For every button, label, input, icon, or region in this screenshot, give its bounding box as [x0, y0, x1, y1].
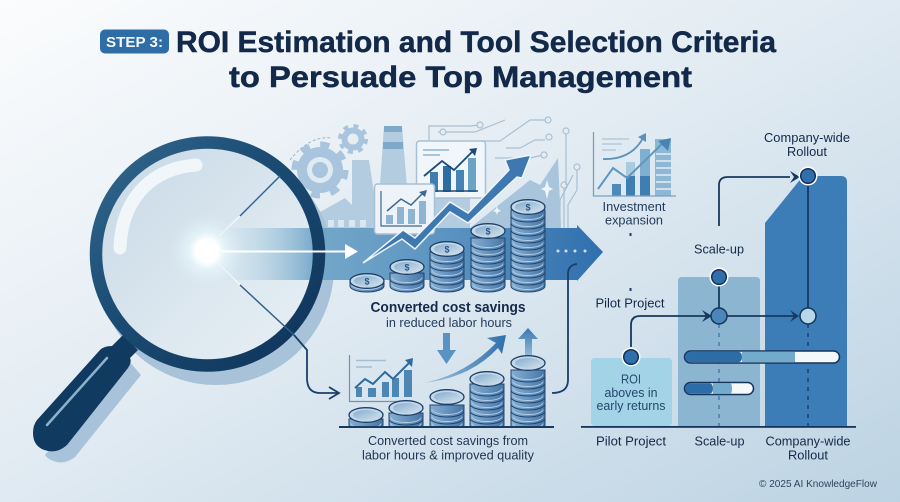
arrow: white beam	[222, 244, 358, 259]
gear large	[295, 145, 345, 195]
badge: step 3: STEP 3:	[106, 34, 163, 51]
text: pilot box: ROI	[621, 372, 641, 386]
progress bar: short	[684, 382, 754, 394]
badge: step 3	[100, 30, 169, 54]
stack 3	[430, 390, 464, 431]
chart card: large	[416, 141, 486, 198]
lower mini chart	[350, 355, 413, 402]
arrowheads	[702, 171, 800, 322]
progress bar: long	[684, 351, 840, 363]
stack 4: $	[485, 226, 491, 236]
heading: to Persuade Top Management	[229, 61, 692, 94]
ring	[96, 142, 319, 366]
stack 1	[350, 274, 384, 292]
lens beams	[219, 176, 294, 335]
stack 4	[471, 224, 505, 292]
factory windows	[328, 220, 366, 227]
coin stacks: lower	[349, 356, 545, 431]
lens highlight	[120, 165, 196, 248]
arrow: connector to pilot	[552, 264, 577, 393]
text: converted cost savings: Converted cost savings	[370, 300, 526, 316]
label: investment expansion: expansion	[605, 214, 663, 228]
labels: stages: Rollout	[787, 145, 828, 159]
arrow: swoosh	[423, 335, 506, 383]
connector lines	[631, 177, 808, 426]
labels: stages: Company-wide	[764, 131, 850, 145]
magnifier ring and handle	[33, 142, 319, 451]
node: pilot	[622, 348, 640, 366]
panel: company-wide bar	[765, 176, 847, 426]
labels: stages: Rollout	[788, 448, 829, 462]
handle	[33, 335, 138, 451]
text: lower caption	[362, 433, 534, 462]
labels: stages	[596, 131, 851, 462]
chart: investment expansion	[594, 132, 676, 196]
arrow: up	[518, 328, 538, 355]
baseline	[581, 426, 856, 428]
stack 2: $	[404, 262, 410, 272]
band dots	[556, 250, 586, 252]
text: lower caption: Converted cost savings from	[368, 433, 528, 448]
stack 4	[470, 372, 504, 431]
text: converted cost savings	[370, 300, 526, 330]
background mountain shape	[470, 158, 561, 228]
magnifier shadow	[45, 149, 334, 462]
arrow: rising trend	[363, 155, 531, 263]
text: pilot box: aboves in	[604, 386, 658, 400]
stack 5	[511, 200, 545, 292]
node: scale-up middle	[711, 308, 727, 324]
labels: stages: Company-wide	[766, 434, 851, 448]
stack 3: $	[444, 244, 450, 254]
factory silhouette	[320, 126, 470, 228]
arrow: lens to lower chart	[294, 335, 339, 399]
lens	[100, 146, 316, 362]
node: scale-up top	[710, 268, 728, 286]
icon: factory and gears	[290, 126, 470, 228]
stack 2	[390, 260, 424, 292]
labels: stages: Pilot Project	[596, 434, 667, 448]
copyright: © 2025 AI KnowledgeFlow	[759, 478, 877, 490]
coin stacks: upper	[350, 200, 545, 292]
stack 2	[389, 401, 423, 431]
node: company-wide top	[798, 166, 818, 186]
labels: stages: Scale-up	[694, 434, 745, 448]
heading: ROI Estimation and Tool Selection Criteria	[176, 26, 776, 59]
sparkles	[493, 180, 553, 215]
stack 5	[511, 356, 545, 431]
labels: stages: Pilot Project	[596, 296, 665, 310]
text: pilot box	[596, 372, 666, 413]
gear small	[340, 126, 366, 152]
title	[100, 26, 776, 94]
text: lower caption: labor hours & improved quality	[362, 448, 534, 462]
stack 3	[430, 242, 464, 292]
label: investment expansion	[602, 200, 666, 228]
stack 5: $	[525, 202, 531, 212]
panel: magnifying glass	[45, 146, 334, 462]
text: converted cost savings: in reduced labor hours	[386, 315, 512, 330]
label: investment expansion: Investment	[602, 200, 666, 214]
node: company-wide middle	[800, 308, 816, 324]
circuit lines	[429, 117, 580, 228]
arrow: down	[437, 333, 456, 364]
stack 1: $	[364, 276, 370, 286]
panel: scale-up bar	[678, 277, 760, 426]
arrow band	[222, 225, 603, 281]
text: pilot box: early returns	[596, 399, 666, 413]
heading	[176, 26, 776, 94]
lens flare	[169, 213, 245, 289]
chart card: small	[374, 184, 434, 234]
stack 1	[348, 407, 384, 426]
panel: pilot bar	[591, 358, 672, 426]
labels: stages: Scale-up	[694, 242, 744, 256]
